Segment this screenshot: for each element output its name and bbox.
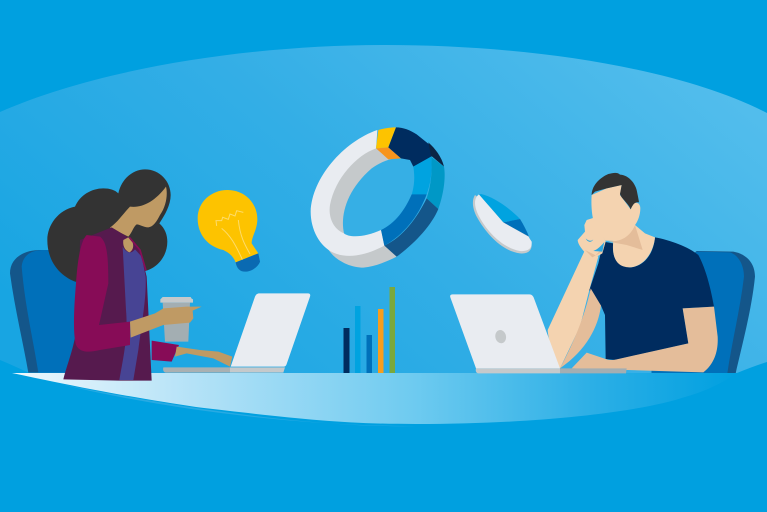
laptop base shadow	[560, 368, 627, 373]
face and neck	[110, 187, 167, 237]
laptop logo	[494, 329, 507, 344]
slice face	[475, 194, 532, 251]
laptop lid	[450, 294, 560, 368]
man	[548, 173, 718, 372]
inner wall	[330, 147, 401, 233]
neck shadow	[608, 225, 643, 250]
right laptop	[450, 294, 627, 373]
bulb base	[236, 253, 260, 272]
collar skin	[123, 237, 133, 252]
far sleeve	[152, 341, 179, 362]
shirt	[589, 237, 714, 360]
typing arm	[175, 347, 232, 367]
slice side	[473, 195, 532, 253]
neck	[613, 225, 655, 267]
jacket body	[63, 227, 152, 381]
hole	[343, 158, 415, 236]
pie slice	[473, 194, 532, 253]
white face	[311, 130, 384, 256]
left arm	[548, 250, 598, 368]
navy segment	[388, 127, 432, 167]
jacket lapel	[129, 237, 146, 271]
light ellipse backdrop	[0, 45, 767, 373]
jacket sleeve upper	[74, 235, 130, 352]
hair	[47, 169, 171, 285]
light bulb	[198, 190, 260, 272]
left chair	[10, 250, 80, 373]
outer side wall	[327, 243, 397, 268]
left laptop	[163, 293, 310, 373]
right arm	[572, 307, 718, 372]
dark navy side	[428, 142, 444, 167]
phone gap	[586, 238, 604, 252]
filament	[216, 211, 250, 262]
table	[12, 373, 737, 426]
orange segment	[376, 147, 401, 159]
slice light blue	[479, 194, 520, 222]
hand	[578, 217, 606, 259]
blue segment	[381, 194, 427, 246]
teal side	[427, 157, 445, 209]
coffee cup	[160, 297, 193, 342]
light blue segment	[412, 157, 432, 195]
dark blue side	[384, 198, 438, 257]
forearm with cup hand	[130, 307, 202, 338]
slice blue	[503, 219, 529, 237]
hand shadow	[585, 246, 604, 257]
bulb glass	[198, 190, 258, 262]
bar chart	[344, 287, 395, 373]
hair	[592, 173, 639, 209]
shirt	[119, 247, 146, 380]
right chair	[650, 251, 755, 374]
donut chart	[311, 127, 445, 268]
yellow segment	[376, 127, 396, 148]
left arm shadow	[560, 288, 601, 368]
woman	[47, 169, 232, 381]
face	[591, 185, 640, 241]
laptop base	[476, 368, 560, 373]
